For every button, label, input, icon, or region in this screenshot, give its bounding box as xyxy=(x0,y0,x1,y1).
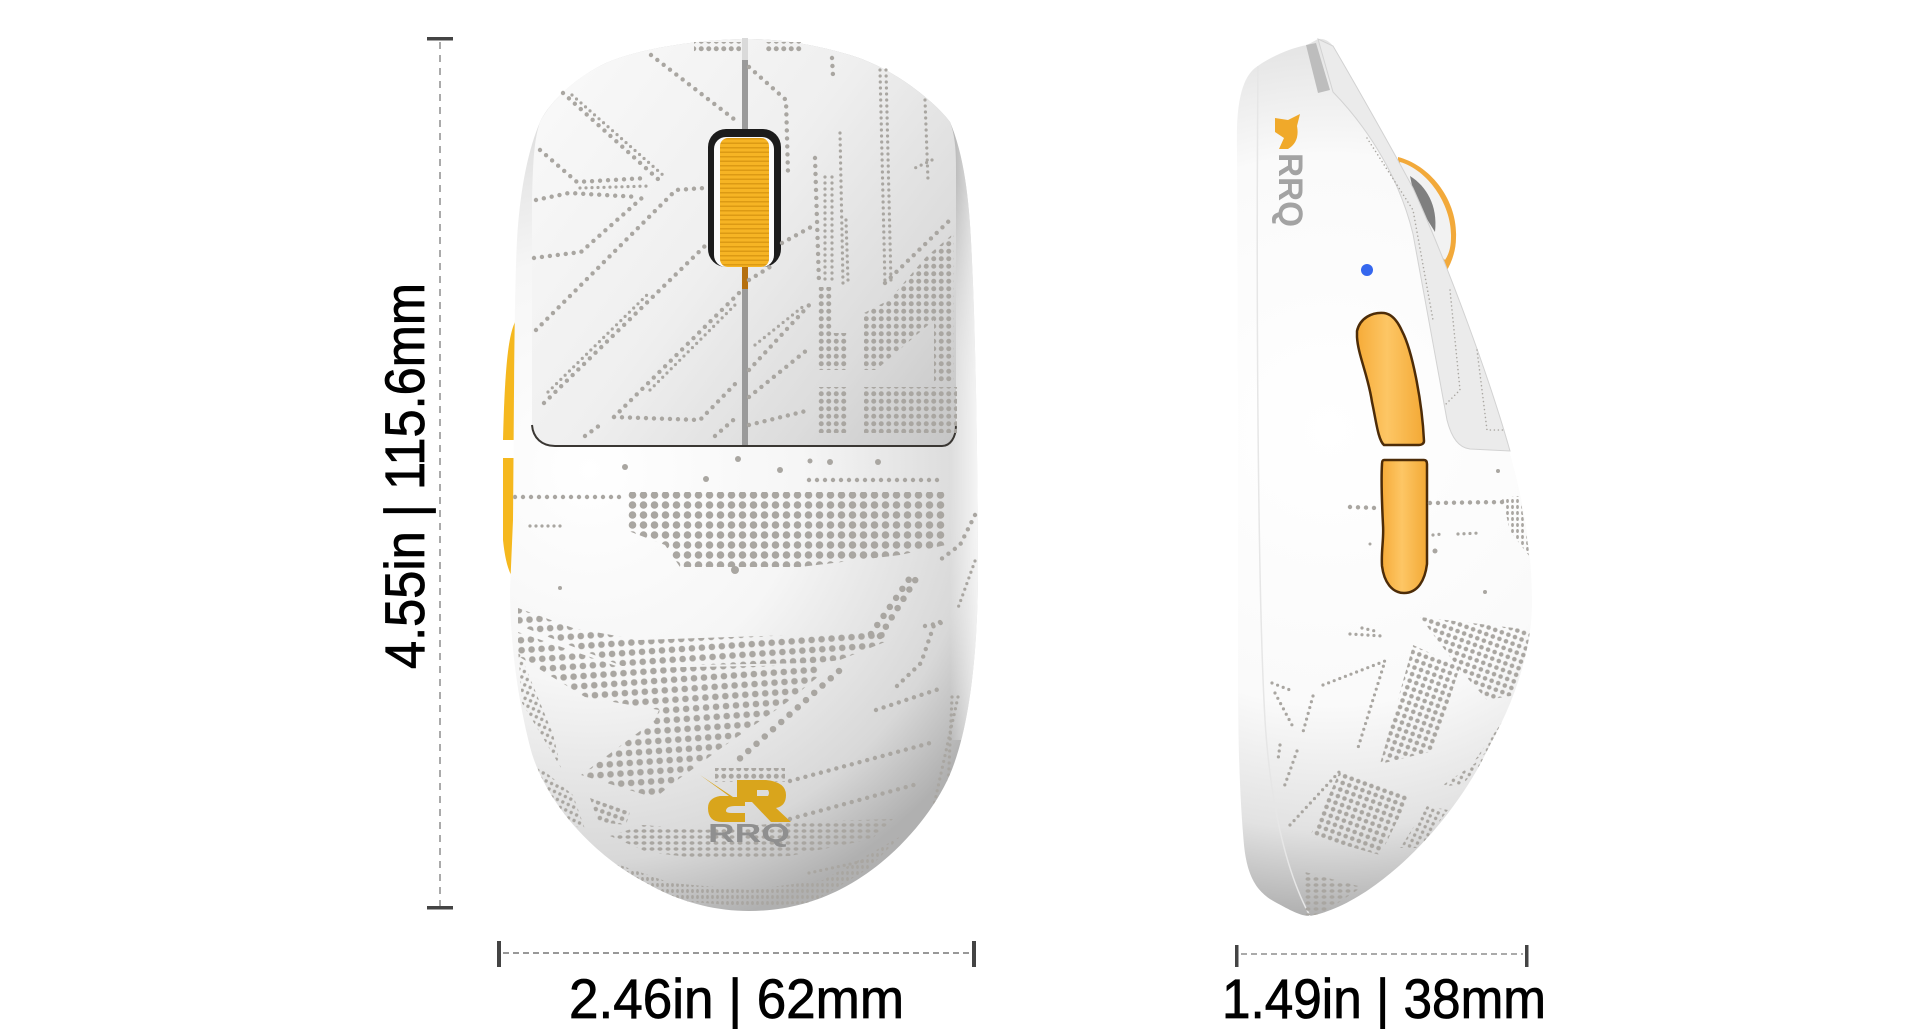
dimension: width xyxy=(497,941,976,1029)
dot pattern: palm upper band xyxy=(515,456,975,590)
logo: RRQ front xyxy=(700,775,791,848)
logo wordmark: RRQ xyxy=(708,818,790,848)
front view left side buttons xyxy=(503,322,515,580)
logo mark xyxy=(700,775,745,822)
side seam line xyxy=(1257,66,1310,916)
front view main buttons xyxy=(532,39,956,445)
dot pattern: palm central field xyxy=(518,561,975,819)
dot pattern: left button xyxy=(534,42,741,436)
dot pattern: palm lower fields xyxy=(518,649,901,907)
front view body shell xyxy=(510,39,978,911)
height tick marks and dashed line xyxy=(427,37,453,910)
mouse: top view xyxy=(503,38,979,911)
side dot pattern xyxy=(1272,469,1532,915)
side scroll wheel xyxy=(1398,157,1456,272)
center slit xyxy=(742,38,748,445)
width ticks and dashed line xyxy=(497,941,976,967)
side indicator LED xyxy=(1361,264,1373,276)
front view right rim highlight xyxy=(954,133,978,740)
side logo wordmark: RRQ xyxy=(1271,153,1309,227)
button lower edge shadow xyxy=(532,425,956,446)
side button panel dot lines xyxy=(1367,138,1505,430)
height label: 4.55in | 115.6mm xyxy=(373,283,436,669)
side upper button xyxy=(1357,313,1424,445)
width label: 2.46in | 62mm xyxy=(569,967,904,1029)
side logo mark xyxy=(1275,114,1300,149)
depth ticks and dashed line xyxy=(1235,945,1528,967)
depth label: 1.49in | 38mm xyxy=(1222,967,1546,1029)
side scroll slot xyxy=(1306,43,1330,93)
scroll wheel xyxy=(708,129,781,267)
dot pattern: right button xyxy=(749,42,957,433)
side logo xyxy=(1271,114,1309,227)
mouse: side view xyxy=(1237,39,1532,916)
side body shell xyxy=(1237,39,1532,916)
logo mark right xyxy=(737,780,791,822)
dimension: depth xyxy=(1222,945,1546,1029)
side lower button xyxy=(1382,460,1427,593)
side top button panel xyxy=(1318,39,1510,451)
dimension: height xyxy=(373,37,453,910)
